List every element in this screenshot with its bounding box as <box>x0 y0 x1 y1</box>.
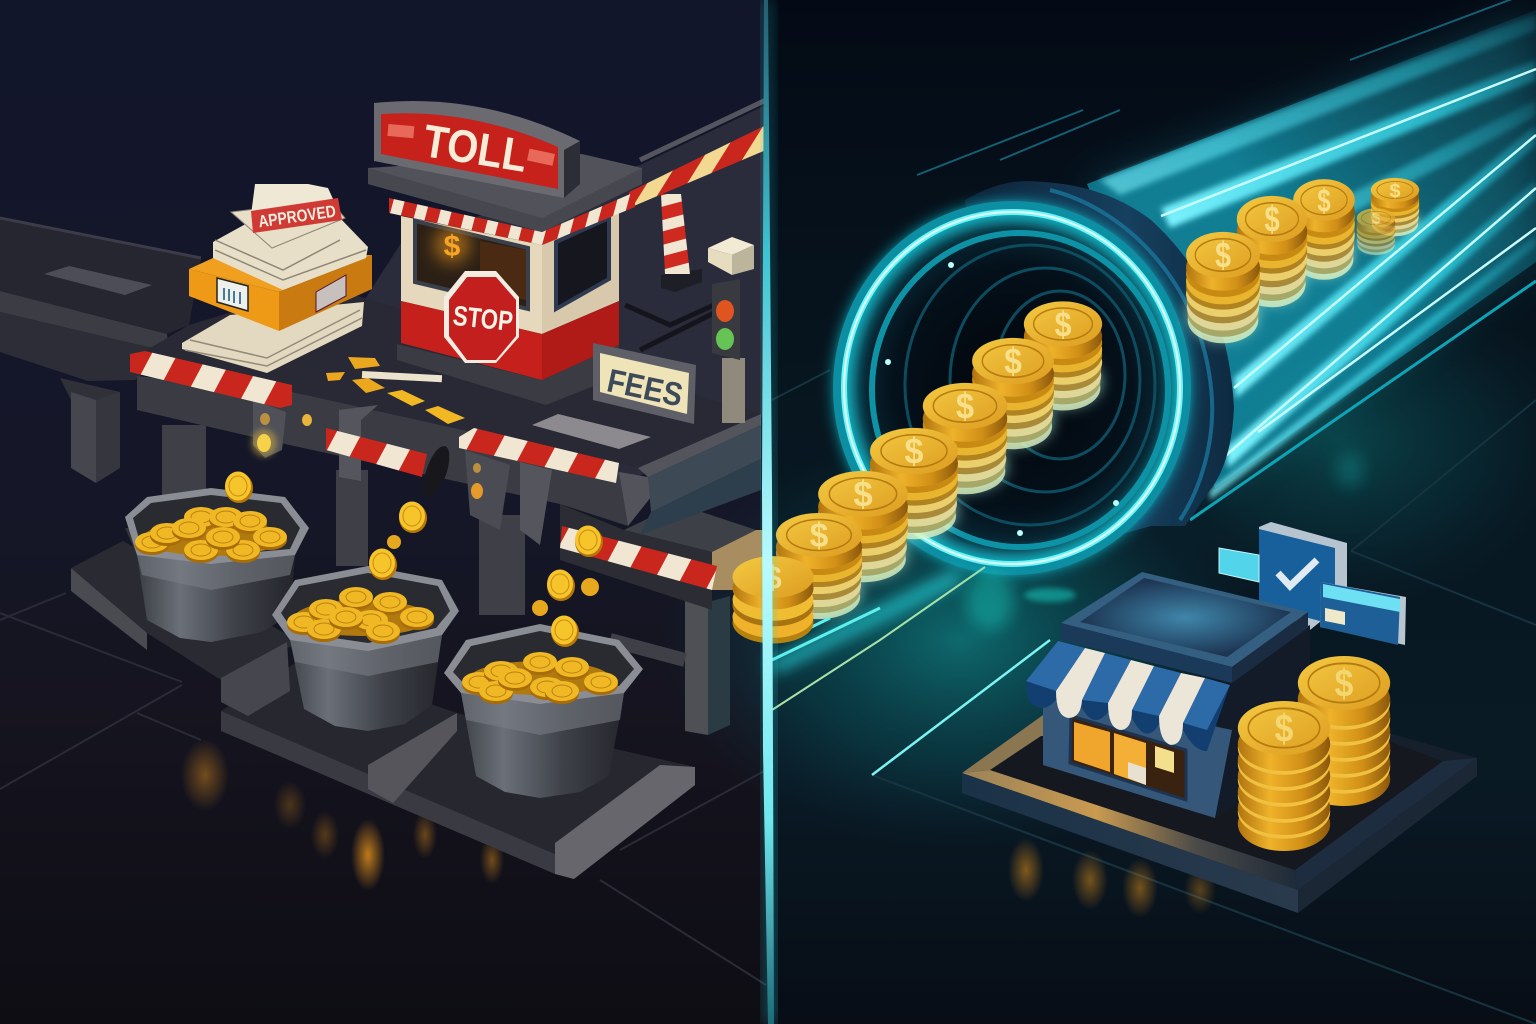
gold bars and ticket on the belt <box>326 357 465 424</box>
near coin stacks leaving the tunnel <box>776 301 1102 619</box>
stack 6 <box>972 338 1054 449</box>
stack 2 <box>776 513 862 619</box>
latch <box>423 446 449 498</box>
left bridge section <box>0 218 201 483</box>
base front plate <box>221 660 695 854</box>
stop sign <box>444 271 519 363</box>
bowl of coins 1 <box>125 488 309 642</box>
far stack 4: $ <box>1264 199 1280 239</box>
far stack 1 <box>1371 178 1419 236</box>
floor light trails <box>772 452 1364 775</box>
paper stacks and orange box <box>182 184 372 373</box>
table bracket right <box>465 450 510 530</box>
toll sign <box>374 101 580 198</box>
table legs <box>162 425 730 735</box>
stack 6: $ <box>1004 342 1022 382</box>
lower base platform <box>71 541 695 879</box>
rear stack: $ <box>1335 661 1353 705</box>
stack 2: $ <box>810 518 829 555</box>
fees sign <box>593 343 696 424</box>
conveyor table top <box>130 285 761 545</box>
tunnel cap rim highlight <box>1050 190 1212 520</box>
booth walls <box>401 216 542 334</box>
far coin stacks in the tunnel <box>1186 178 1419 343</box>
tunnel body with light streaks <box>917 0 1536 520</box>
far stack 2: $ <box>1372 211 1381 228</box>
bank card <box>1320 582 1406 645</box>
stack crossing the divider <box>733 556 813 644</box>
roof <box>368 154 642 232</box>
stack 4 <box>870 428 958 539</box>
stack 5: $ <box>956 387 974 427</box>
upper papers <box>213 218 368 290</box>
shop right wall <box>1215 625 1310 818</box>
far stack 5 <box>1186 232 1260 343</box>
merchant coin stacks <box>1238 656 1390 851</box>
bowl of coins 2 <box>272 566 459 731</box>
toll booth <box>368 101 642 405</box>
far stack 5: $ <box>1215 236 1231 275</box>
front stack: $ <box>1275 706 1293 750</box>
stack crossing the divider: $ <box>764 559 782 596</box>
stack 3: $ <box>853 475 873 515</box>
far stack 2 <box>1357 208 1395 255</box>
orange box <box>189 255 372 331</box>
far stack 4 <box>1237 196 1307 307</box>
left background <box>0 0 770 1024</box>
stack 4: $ <box>905 432 923 472</box>
shop <box>1026 572 1310 818</box>
table front wall <box>137 376 628 526</box>
small cyan card <box>1219 548 1259 582</box>
awning <box>1026 641 1230 751</box>
toll sign: TOLL <box>420 114 531 182</box>
falling coins <box>225 472 603 647</box>
base divider block <box>368 713 457 803</box>
table clamp <box>339 405 378 481</box>
booth base <box>397 344 619 405</box>
traffic light <box>708 237 754 423</box>
far stack 3 <box>1293 179 1355 280</box>
merchant platform <box>962 715 1477 913</box>
lower conveyor with barrier <box>560 504 766 610</box>
shop front wall <box>1043 690 1232 818</box>
shop window <box>1070 716 1186 800</box>
right background <box>660 0 1536 1024</box>
front stack <box>1238 701 1330 851</box>
back road <box>300 100 766 490</box>
floor seams <box>0 370 1536 1024</box>
warning lights <box>251 413 483 499</box>
stack 7: $ <box>1055 304 1071 344</box>
base step block <box>221 642 290 716</box>
stack 5 <box>923 383 1007 494</box>
striped barrier front right <box>459 428 619 483</box>
rear stack <box>1298 656 1390 806</box>
front window <box>415 221 528 309</box>
far stack 1: $ <box>1389 180 1401 202</box>
base left step <box>71 541 300 680</box>
stack 3 <box>818 471 908 582</box>
stop sign: STOP <box>451 300 514 337</box>
traffic cone <box>661 194 702 292</box>
center divider <box>762 0 774 1024</box>
far stack 3: $ <box>1317 183 1331 219</box>
front window: $ <box>444 230 461 263</box>
floor light reflections <box>181 739 1216 918</box>
shop roof <box>1061 572 1308 683</box>
barrier arm <box>629 125 766 208</box>
side window <box>556 218 609 309</box>
table bracket left <box>253 400 286 458</box>
awning <box>389 198 542 245</box>
payment check card <box>1259 522 1347 630</box>
bowl of coins 3 <box>444 624 643 798</box>
approved stamp: APPROVED <box>257 202 337 231</box>
tunnel dark cap <box>965 181 1234 565</box>
striped barrier middle <box>326 428 427 477</box>
fees sign: FEES <box>604 362 686 414</box>
striped barrier front left <box>130 351 292 408</box>
lower papers <box>182 302 364 373</box>
tunnel glow ring <box>837 205 1187 571</box>
stack 7 <box>1024 301 1102 411</box>
